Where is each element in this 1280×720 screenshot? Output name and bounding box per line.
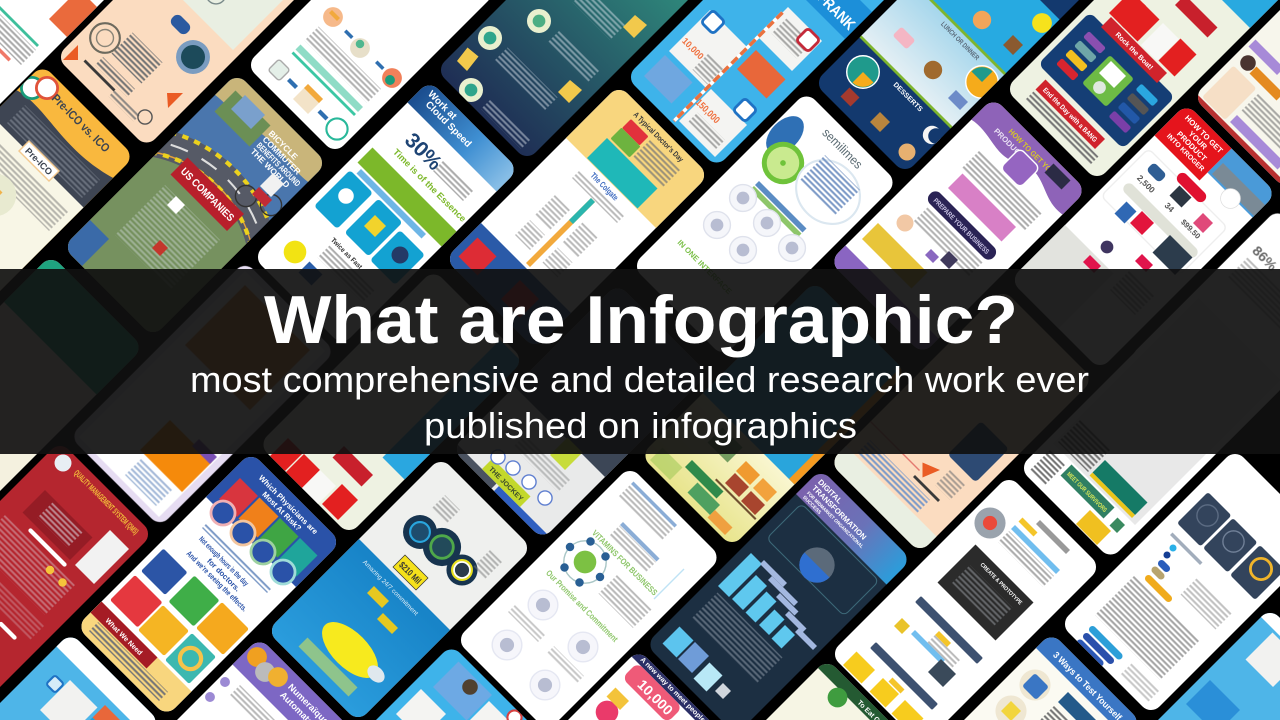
dresses bbox=[1109, 0, 1196, 78]
card: cream dresses and device bbox=[1010, 0, 1278, 176]
card: lavender orange list bbox=[62, 255, 342, 535]
white stat sheets bbox=[669, 7, 822, 157]
strip: what we need: What We Need bbox=[104, 617, 143, 657]
chart: horizontal bars group two bbox=[1074, 624, 1124, 674]
card: The Jockey bbox=[445, 278, 715, 548]
card: Pre-ICO vs ICO bbox=[0, 70, 130, 291]
road and green field bbox=[68, 132, 270, 269]
card: Typical Doctor's Day bbox=[450, 90, 704, 344]
icon tiles: cyan service panels bbox=[316, 172, 424, 284]
card: food calories day to night bbox=[819, 0, 1079, 169]
card: shark right bbox=[1090, 595, 1280, 720]
card: Pre-ICO vs ICO: Pre-ICO bbox=[23, 146, 54, 177]
text: not enough hours: And we're seeing the effects. bbox=[185, 549, 249, 613]
specialty tiles bbox=[219, 478, 318, 576]
tag: ten million: $210 Mil bbox=[397, 560, 423, 586]
banner: rock the boat: Rock the Boat! bbox=[1114, 31, 1154, 72]
card: peach engineering sheet lower bbox=[822, 282, 1100, 560]
heading: How to get your product on iTunes bbox=[994, 128, 1050, 170]
text: not enough hours bbox=[184, 535, 262, 613]
tile: survivors: MEET OUR SURVIVORS bbox=[1065, 471, 1108, 514]
percentage rings bbox=[206, 496, 300, 590]
heading: bicycle commuter: THE WORLD bbox=[249, 146, 292, 190]
subtitle line two: published on infographics bbox=[424, 405, 857, 446]
icon: robot bbox=[968, 501, 1012, 545]
panel: chalkboard: CREATE & PROTOTYPE bbox=[979, 562, 1023, 607]
icon: Pre and ICO logo rings bbox=[20, 76, 59, 100]
icon: lime slice with blue shape bbox=[762, 116, 804, 184]
icons: hexagon cubes bbox=[660, 626, 738, 704]
navy ring cloud bbox=[396, 503, 488, 595]
heading: bicycle commuter bbox=[251, 130, 300, 187]
heading: quality management system: QUALITY MANAGEMENT SYSTEM (QMS) bbox=[72, 468, 141, 536]
card: product into Kroger bbox=[1002, 95, 1280, 382]
card: 86 percent stat: 86% bbox=[1249, 242, 1280, 274]
label: amazing commitment: Amazing 24/7 commitment bbox=[361, 559, 419, 617]
sign: Kroger heading: INTO KROGER bbox=[1165, 133, 1205, 173]
heading: digital transformation: SUCCESS bbox=[801, 495, 823, 516]
heading: bicycle commuter: BICYCLE bbox=[267, 128, 300, 162]
heading: bicycle commuter: BENEFITS AROUND bbox=[255, 140, 303, 188]
tag: ten million bbox=[393, 555, 428, 590]
banner: end the day: End the Day with a BANG bbox=[1041, 87, 1098, 144]
tile: survivors bbox=[1060, 464, 1114, 518]
card: numeralique automated bbox=[78, 630, 360, 720]
card: meet survivors grey bbox=[1012, 280, 1280, 565]
stat: ten thousand bbox=[622, 662, 682, 720]
card: white stats with bars bbox=[1055, 440, 1280, 720]
card: eat green bbox=[645, 650, 928, 720]
card: 3 Ways to Test Yourself bbox=[870, 625, 1152, 720]
card: peach engineering sheet bbox=[61, 0, 294, 142]
card: yellow farm tags bbox=[635, 275, 912, 552]
stat tiles grid bbox=[108, 545, 249, 686]
dark gauge tiles bbox=[1177, 492, 1280, 600]
heading: Work at Cloud Speed: Cloud Speed bbox=[423, 99, 473, 150]
card: product on iTunes bbox=[834, 102, 1082, 350]
card: white notes top-left bbox=[0, 0, 104, 104]
chart: cyan bars bbox=[718, 553, 814, 649]
card: digital transformation bbox=[638, 462, 920, 720]
panel: chalkboard bbox=[938, 544, 1034, 640]
heading: digital transformation: DIGITAL bbox=[816, 478, 844, 506]
heading: our promise and commitment: Our Promise and Commitment bbox=[544, 568, 620, 644]
card: blue TV million stats bbox=[631, 0, 884, 162]
card: cream top-right text bbox=[1188, 0, 1280, 198]
subtitle line one: most comprehensive and detailed research work ever bbox=[190, 359, 1089, 400]
card: navy teal product steps bbox=[441, 0, 688, 156]
stat: one fifty thousand: 150,000 bbox=[693, 97, 722, 126]
sign: Kroger heading: HOW TO GET bbox=[1183, 113, 1225, 155]
heading: A Typical Doctor's Day: A Typical Doctor's Day bbox=[632, 110, 686, 164]
heading: physicians: Most At Risk? bbox=[260, 490, 303, 533]
sign: Kroger heading: PRODUCT bbox=[1175, 129, 1209, 163]
stat: ten thousand: 10,000 bbox=[680, 36, 706, 61]
strip: the jockey bbox=[482, 458, 530, 507]
heading: physicians: Which Physicians are bbox=[257, 473, 320, 537]
chart: pie bbox=[792, 540, 842, 590]
heading: vitamins for business: VITAMINS FOR BUSINESS bbox=[590, 528, 660, 598]
heading: digital transformation: FOR MIDMARKET ORGANIZATIONAL bbox=[805, 491, 864, 550]
icon: cyclist bbox=[234, 173, 284, 216]
section label: lunch or dinner: LUNCH OR DINNER bbox=[939, 21, 980, 62]
icon: lime with nodes bbox=[551, 528, 619, 596]
yellow cloud bbox=[312, 612, 388, 688]
pie clocks bbox=[846, 55, 999, 99]
icon: round badges bbox=[459, 9, 551, 102]
card: Which physicians are most at risk bbox=[72, 448, 348, 720]
card: shark left bbox=[0, 628, 174, 720]
card: hidden under band left bbox=[0, 248, 150, 530]
heading: bicycle commuter: COMMUTER bbox=[261, 134, 303, 177]
label: in one interface: IN ONE INTERFACE bbox=[676, 238, 734, 296]
card: step by step launch bbox=[825, 470, 1108, 720]
card: 86 percent stat bbox=[1120, 200, 1280, 460]
heading: digital transformation: TRANSFORMATION bbox=[810, 484, 868, 542]
card: Work at Cloud Speed bbox=[258, 86, 514, 340]
card: vitamins for business bbox=[450, 455, 732, 720]
stat: thirty four: 34 bbox=[1163, 200, 1177, 214]
heading: The Colgate: The Colgate bbox=[589, 170, 621, 203]
strip: a new way bbox=[628, 640, 740, 720]
section label: desserts: DESSERTS bbox=[892, 81, 924, 114]
stat: price: $99.50 bbox=[1179, 218, 1202, 241]
banner: rock the boat bbox=[1101, 17, 1167, 83]
sign: Kroger heading: YOUR bbox=[1187, 129, 1209, 152]
strip: the jockey: THE JOCKEY bbox=[487, 466, 524, 503]
sign: Kroger heading bbox=[1154, 98, 1238, 180]
card: dresses cream lower bbox=[255, 260, 535, 540]
card: Work at Cloud Speed: Time is of the Essence bbox=[391, 147, 468, 224]
text: not enough hours: Not enough hours in the day bbox=[197, 535, 251, 588]
stat: ten thousand: 10,000 bbox=[634, 676, 676, 718]
strip: what we need bbox=[90, 602, 158, 668]
stat: 30 percent: 30% bbox=[400, 129, 446, 175]
heading: digital transformation bbox=[801, 478, 877, 554]
chart: horizontal bars group one bbox=[1140, 543, 1201, 604]
heading: Work at Cloud Speed: Work at bbox=[425, 89, 459, 123]
stat: stores count: 2,500 bbox=[1135, 173, 1157, 195]
card: 10,000 new way to meet bbox=[455, 640, 740, 720]
card: quality management system bbox=[0, 435, 160, 720]
label: twice as fast: Twice as Fast bbox=[329, 237, 363, 271]
bar: prepare your business: PREPARE YOUR BUSINESS bbox=[932, 197, 990, 256]
card: blue TV lower bbox=[272, 638, 550, 720]
heading: How to get your product on iTunes: HOW TO GET YOUR bbox=[1007, 127, 1061, 181]
card: hands-on steps white bbox=[251, 0, 489, 149]
banner: US companies: US COMPANIES bbox=[178, 166, 236, 224]
dark title band bbox=[0, 269, 1280, 454]
logo: semilimes: semilimes bbox=[819, 125, 866, 172]
card: semilimes lime panel bbox=[637, 96, 892, 352]
card: white circles and blue SEO bbox=[260, 450, 540, 720]
heading: How to get your product on iTunes: PRODUCT ON bbox=[992, 127, 1036, 170]
text: not enough hours: for doctors. bbox=[205, 557, 242, 593]
panel: navy device diagram bbox=[1038, 12, 1175, 149]
timeline bbox=[526, 198, 595, 267]
card: bicycle commuter benefits bbox=[68, 78, 322, 332]
title: What are Infographic? bbox=[264, 282, 1018, 358]
heading: Pre-ICO vs. ICO: Pre-ICO vs. ICO bbox=[49, 91, 113, 155]
